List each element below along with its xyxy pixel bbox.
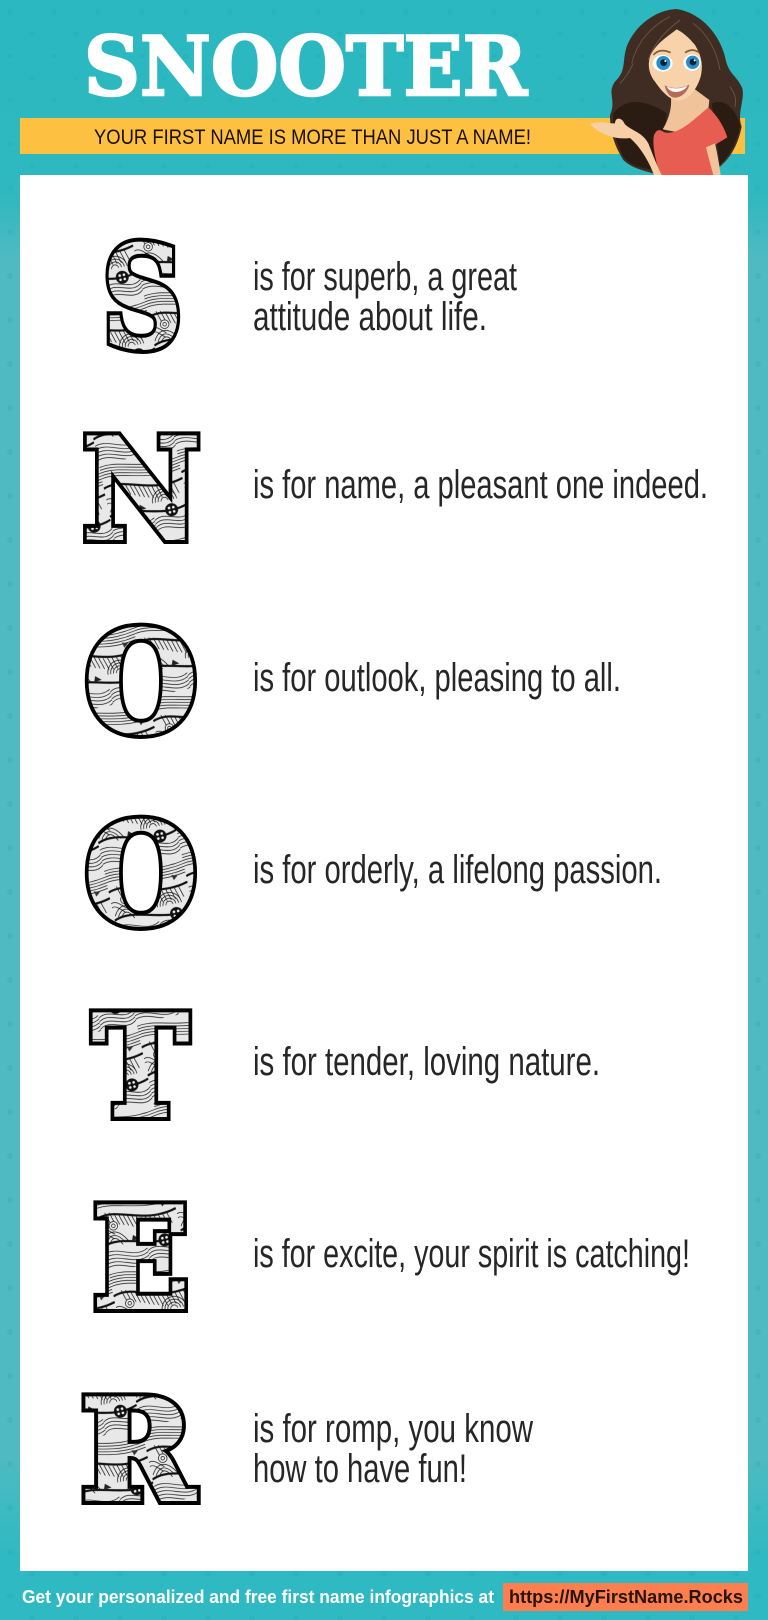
footer message: Get your personalized and free first name infographics at	[22, 1586, 494, 1607]
row: S	[103, 216, 517, 379]
text: superb: is for superb, a great	[253, 255, 517, 299]
row: O	[85, 601, 621, 764]
left arm and hand	[590, 119, 662, 175]
text: tender: is for tender, loving nature.	[253, 1040, 600, 1084]
eyes	[653, 54, 701, 72]
letter O: O	[85, 601, 197, 764]
title: SNOOTER	[84, 20, 528, 115]
letter O: O	[85, 793, 197, 956]
neck	[663, 89, 709, 133]
letter E: E	[93, 1177, 189, 1340]
mouth	[665, 85, 689, 98]
text: romp: is for romp, you know	[253, 1407, 533, 1451]
letter O: O	[85, 793, 197, 956]
footer url badge: https://MyFirstName.Rocks	[509, 1586, 743, 1607]
yellow banner	[20, 118, 745, 154]
text: superb	[253, 255, 517, 339]
letter E: E	[93, 1177, 189, 1340]
letter S: S	[103, 216, 182, 379]
letter S: S	[103, 216, 182, 379]
text: romp	[253, 1407, 533, 1491]
red top	[653, 107, 727, 175]
letter O: O	[85, 601, 197, 764]
row: T	[93, 985, 600, 1148]
letter R: R	[81, 1369, 195, 1532]
letter N: N	[83, 408, 200, 571]
row: O second	[85, 793, 662, 956]
face	[649, 29, 702, 101]
row: R	[81, 1369, 533, 1532]
right arm	[706, 143, 721, 175]
row: E	[93, 1177, 690, 1340]
illustration: smiling woman with long brown hair	[590, 9, 743, 175]
eyebrows	[653, 50, 699, 55]
letter T: T	[93, 985, 188, 1148]
tagline: YOUR FIRST NAME IS MORE THAN JUST A NAME!	[94, 125, 531, 149]
text: outlook: is for outlook, pleasing to all.	[253, 656, 621, 700]
letter N: N	[83, 408, 200, 571]
letter R: R	[81, 1369, 195, 1532]
row: N	[83, 408, 708, 571]
text: superb: attitude about life.	[253, 295, 487, 339]
text: romp: how to have fun!	[253, 1447, 467, 1491]
letter T: T	[93, 985, 188, 1148]
